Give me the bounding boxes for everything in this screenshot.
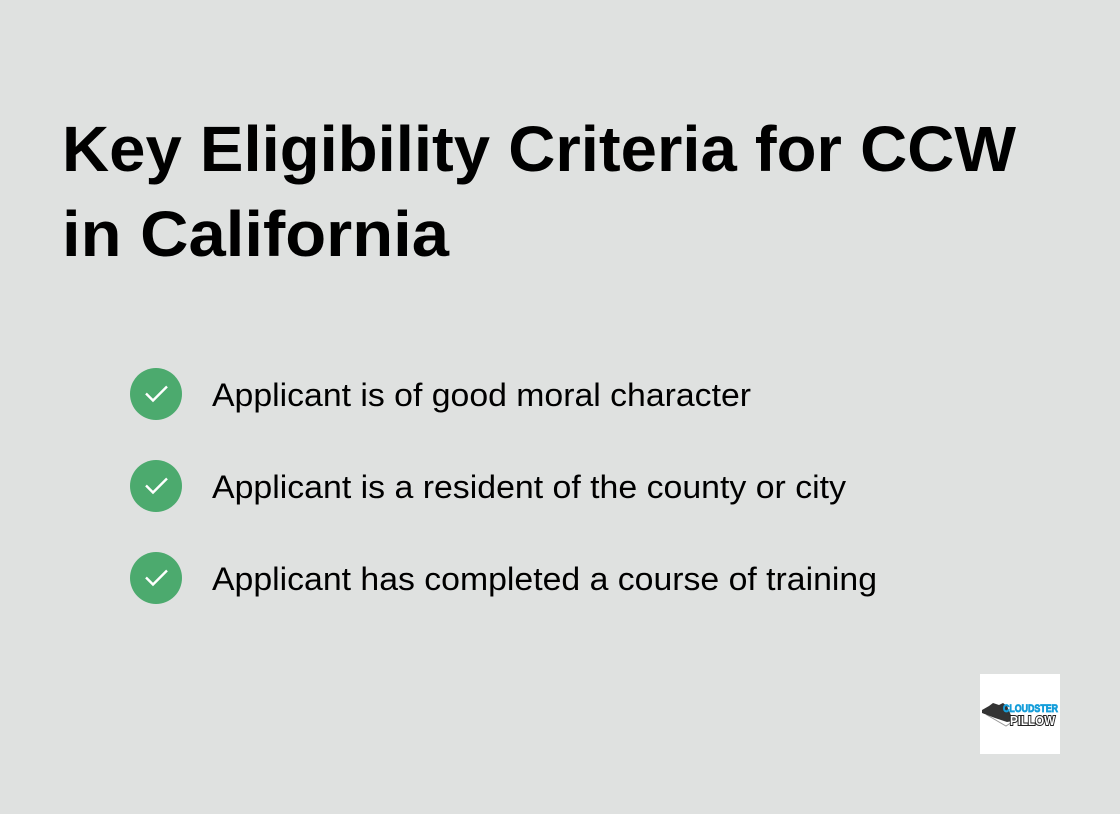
item: training — [130, 552, 877, 604]
item: training: Applicant has completed a course of training — [212, 561, 877, 597]
checklist — [130, 368, 877, 604]
title: Key Eligibility Criteria for CCW — [62, 113, 1017, 185]
logo wordmark: PILLOW — [1010, 713, 1056, 728]
title — [62, 113, 1017, 270]
item: resident — [130, 460, 846, 512]
item: good moral character: Applicant is of good moral character — [212, 377, 751, 413]
logo: Cloudster Pillow — [980, 674, 1060, 754]
item: good moral character — [130, 368, 751, 420]
title: in California — [62, 198, 449, 270]
item: resident: Applicant is a resident of the county or city — [212, 469, 846, 505]
logo wordmark — [1003, 703, 1058, 728]
pillow icon — [982, 703, 1013, 726]
logo wordmark: CLOUDSTER — [1003, 703, 1058, 715]
